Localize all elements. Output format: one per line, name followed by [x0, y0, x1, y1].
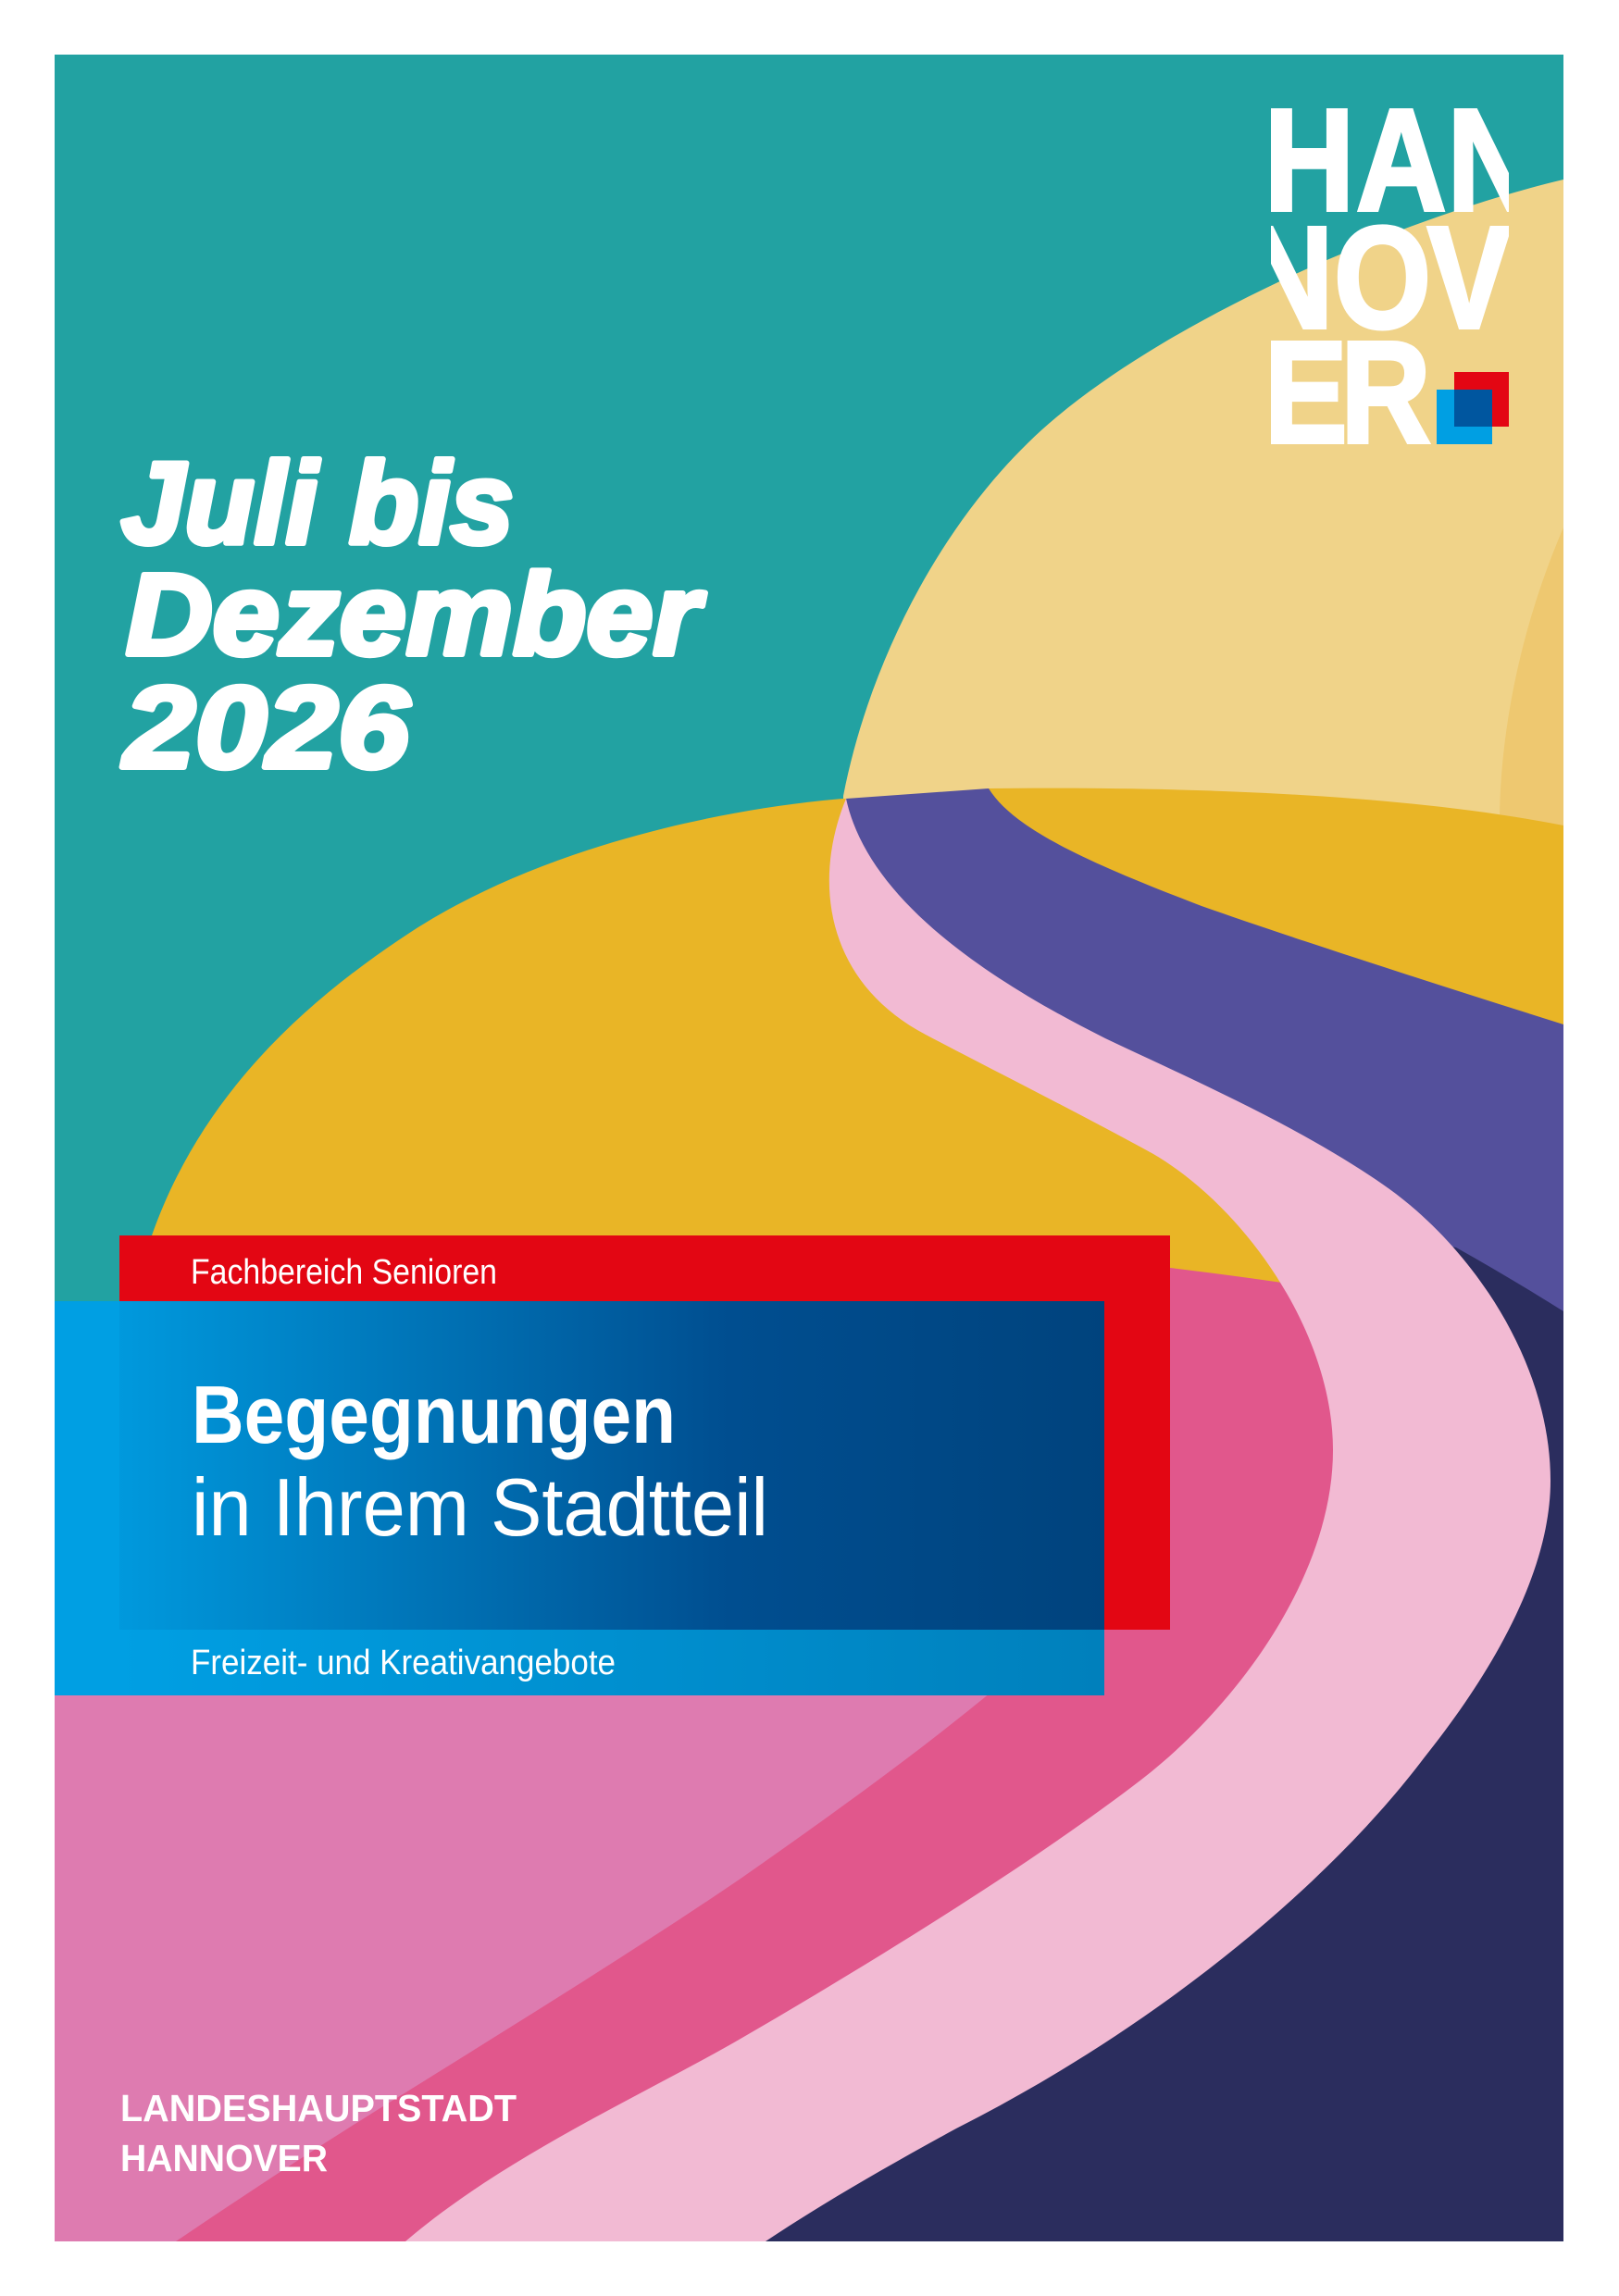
date heading [121, 440, 706, 792]
mauve field [55, 1666, 1018, 2241]
publisher [120, 2087, 517, 2179]
medium pink band [176, 1268, 1333, 2241]
logo: HANNOVER wordmark [1271, 108, 1509, 444]
department label: Fachbereich Senioren [191, 1253, 497, 1292]
light yellow hill [843, 180, 1563, 833]
red frame [119, 1235, 1170, 1630]
teal sky [55, 55, 1563, 1301]
title panel [55, 1235, 1170, 1695]
blue frame strip [55, 1301, 1104, 1695]
logo wordmark text: ER [1264, 311, 1431, 474]
subtitle: Freizeit- und Kreativangebote [191, 1644, 616, 1682]
title line 2: in Ihrem Stadtteil [192, 1461, 768, 1553]
gold hill right [989, 788, 1563, 1024]
date heading: 2026 [122, 664, 411, 792]
logo wordmark text: HAN [1264, 79, 1538, 242]
publisher: LANDESHAUPTSTADT [120, 2087, 517, 2129]
logo wordmark text: NOV [1243, 196, 1511, 359]
purple band [846, 788, 1563, 1311]
darker yellow hill slope [1500, 527, 1563, 833]
logo: overlap square [1454, 390, 1492, 427]
logo: red square [1454, 372, 1509, 427]
gold hill left [152, 799, 1280, 1283]
navy field [722, 1203, 1563, 2241]
light pink winding road [405, 799, 1551, 2241]
overlap gradient panel [119, 1301, 1104, 1630]
logo: blue square [1437, 390, 1492, 444]
date heading: Juli bis [121, 440, 514, 568]
date heading: Dezember [126, 551, 706, 679]
logo wordmark text [1271, 108, 1509, 444]
publisher: HANNOVER [120, 2137, 328, 2179]
title line 1: Begegnungen [192, 1369, 676, 1460]
